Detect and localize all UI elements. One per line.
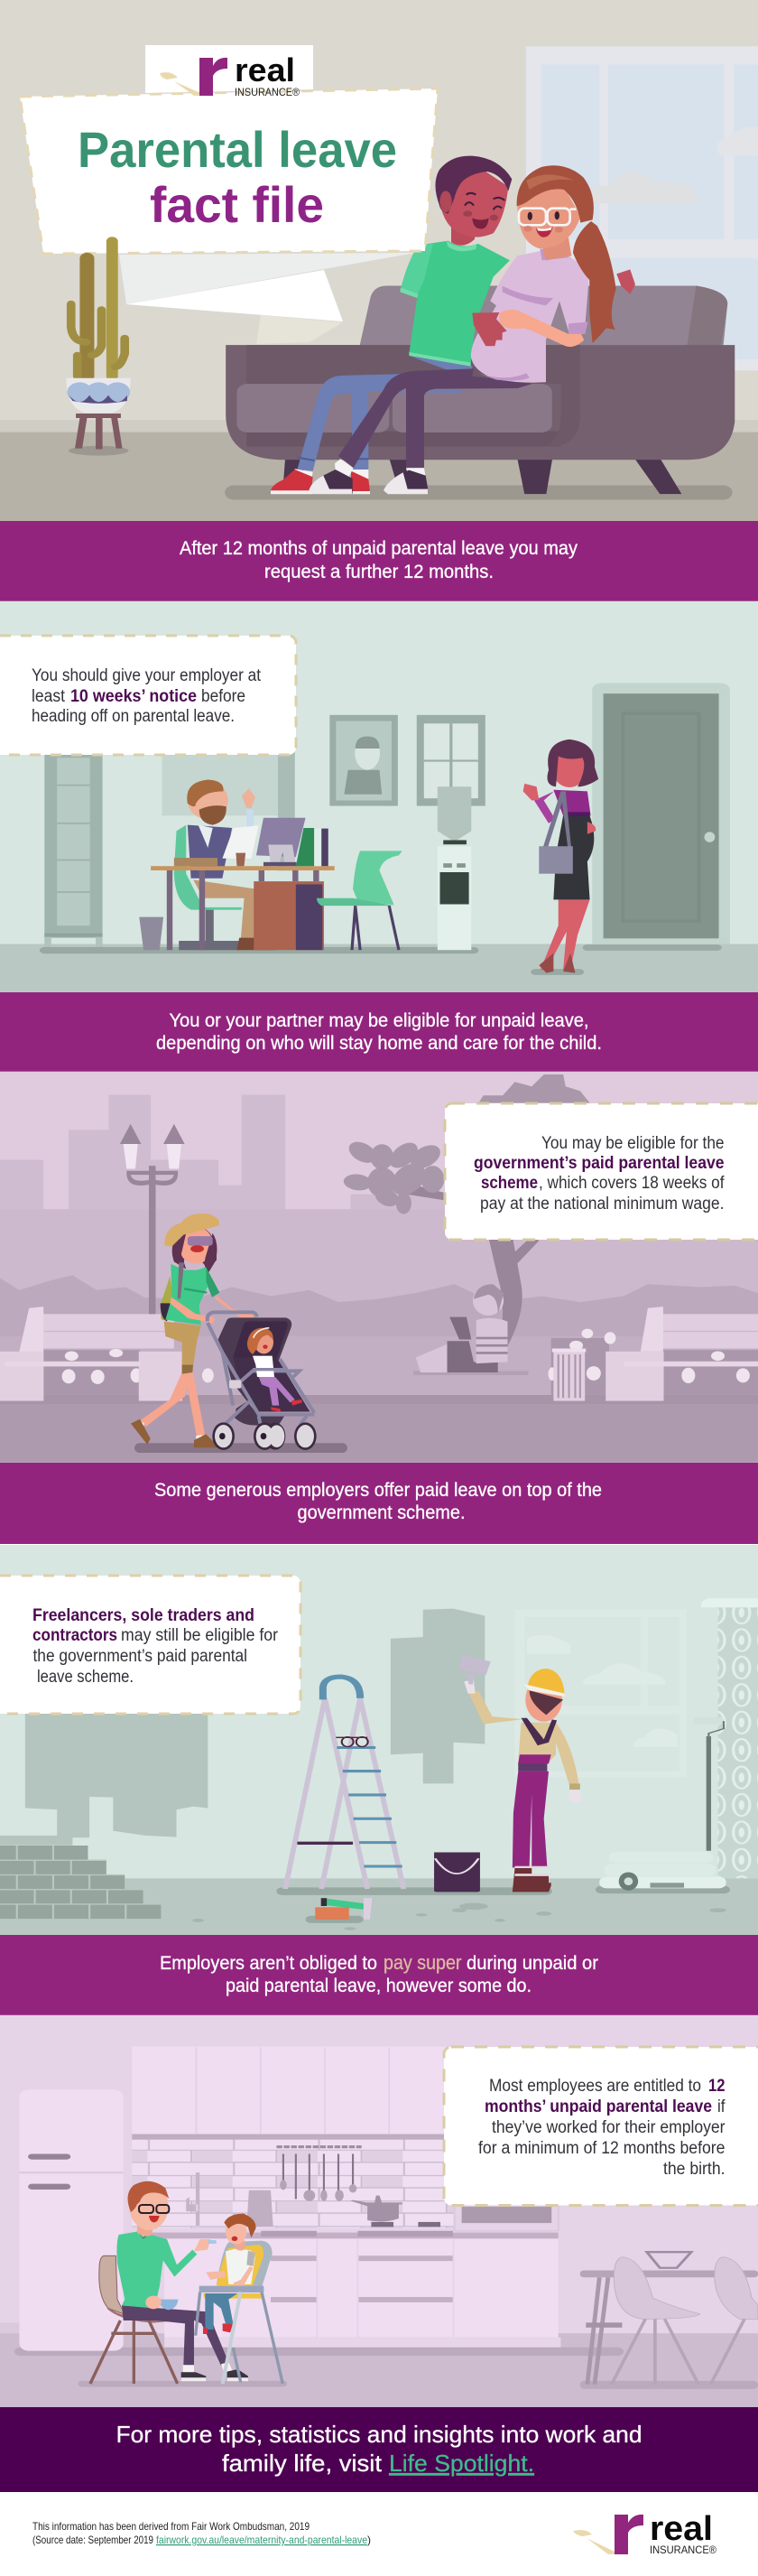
band 5: Life Spotlight.	[389, 2450, 534, 2477]
green chair	[317, 851, 402, 950]
dad	[116, 2181, 248, 2381]
logo: real insurance top: real	[235, 51, 295, 88]
bench right	[605, 1307, 758, 1401]
bucket	[434, 1852, 480, 1892]
band 3: Some generous employers offer paid leave on top of the	[154, 1480, 602, 1501]
litter bin	[552, 1349, 586, 1401]
callout: government scheme: government’s paid parental leave	[474, 1154, 724, 1173]
man at desk	[174, 780, 280, 950]
painter	[459, 1655, 581, 1892]
callout: 10 weeks notice: before	[201, 687, 245, 706]
band 2: depending on who will stay home and care for the child.	[156, 1033, 602, 1054]
door	[583, 683, 730, 951]
logo: real insurance top: INSURANCE®	[235, 86, 300, 98]
band 4: paid parental leave, however some do.	[226, 1976, 532, 1996]
scene: living room and sofa	[0, 0, 758, 521]
woman's head and hat	[164, 1214, 219, 1274]
city skyline	[0, 1095, 448, 1341]
callout: freelancers: leave scheme.	[37, 1668, 134, 1687]
callout: 10 weeks notice: 10 weeks’ notice	[70, 687, 197, 706]
band 4: Employers aren’t obliged to	[160, 1953, 377, 1974]
scene: painter	[0, 1545, 758, 1935]
callout: 12 months unpaid: the birth.	[663, 2160, 726, 2179]
wallpaper rolls and tools	[596, 1852, 730, 1893]
woman and stroller	[131, 1262, 347, 1453]
callout: 12 months unpaid	[444, 2047, 758, 2205]
cactus plant	[66, 241, 131, 456]
dad feeding child	[90, 2181, 282, 2384]
appliances on bench	[186, 2172, 559, 2231]
callout: 10 weeks notice: You should give your employer at	[32, 666, 262, 685]
sofa	[225, 286, 735, 499]
bookshelf	[44, 749, 103, 950]
woman	[131, 1262, 253, 1447]
band 3	[0, 1463, 758, 1544]
title	[78, 121, 397, 233]
flower beds	[43, 1329, 758, 1395]
street lamp	[120, 1124, 185, 1314]
band 1: After 12 months of unpaid parental leave you may	[180, 538, 578, 559]
paint roller	[694, 1717, 724, 1851]
upper cabinets	[132, 2047, 446, 2140]
callout: freelancers: contractors	[32, 1626, 117, 1645]
boy reading	[413, 1284, 529, 1375]
callout: 12 months unpaid: if	[717, 2097, 726, 2116]
source note	[32, 2520, 371, 2546]
source note: This information has been derived from Fair Work Ombudsman, 2019	[32, 2520, 310, 2533]
band 1	[0, 521, 758, 601]
callout: freelancers: may still be eligible for	[121, 1626, 279, 1645]
logo: real insurance footer: real	[650, 2510, 713, 2548]
band 5: For more tips, statistics and insights into work and	[116, 2421, 642, 2448]
callout: 10 weeks notice	[0, 636, 296, 755]
scene: kitchen	[0, 2015, 758, 2408]
callout: 12 months unpaid: Most employees are entitled to	[489, 2077, 701, 2096]
band 2: You or your partner may be eligible for unpaid leave,	[170, 1010, 588, 1031]
band 4	[0, 1935, 758, 2015]
stroller	[208, 1312, 317, 1450]
water cooler	[438, 786, 471, 950]
callout: 12 months unpaid: for a minimum of 12 months before	[478, 2139, 726, 2158]
back window	[162, 749, 295, 870]
callout: 12 months unpaid: they’ve worked for their employer	[492, 2118, 726, 2137]
high chair and child	[196, 2214, 282, 2384]
callout: government scheme: You may be eligible for the	[541, 1134, 724, 1153]
callout: 12 months unpaid: months’ unpaid parental leave	[485, 2097, 712, 2116]
hedge	[0, 1275, 758, 1338]
band 4: pay super	[384, 1951, 462, 1974]
callout: 10 weeks notice: heading off on parental leave.	[32, 707, 235, 726]
man	[271, 156, 635, 494]
scene: office	[0, 601, 758, 993]
title: Parental leave	[78, 121, 397, 178]
band 4: during unpaid or	[467, 1953, 598, 1974]
child in stroller	[247, 1328, 302, 1412]
waste bin	[139, 917, 163, 950]
logo: real insurance footer	[573, 2510, 716, 2556]
callout: freelancers	[0, 1576, 300, 1714]
band 5: family life, visit	[222, 2450, 383, 2477]
ladder	[285, 1677, 403, 1889]
logo: real insurance top	[145, 45, 313, 98]
tile splashback	[132, 2140, 455, 2228]
glasses	[336, 1737, 368, 1746]
title: fact file	[150, 176, 324, 233]
couple on sofa	[271, 156, 635, 494]
lower cabinets	[145, 2233, 560, 2351]
dad's chair	[90, 2255, 178, 2384]
fridge	[14, 2089, 624, 2356]
monitor and binders	[256, 818, 328, 866]
band 3: government scheme.	[298, 1502, 466, 1523]
title callout	[20, 88, 438, 344]
band 2	[0, 992, 758, 1072]
brick and saw	[306, 1898, 372, 1923]
band 5	[0, 2407, 758, 2492]
logo: real insurance footer: INSURANCE®	[650, 2543, 716, 2556]
wallpaper	[701, 1598, 758, 1878]
wall frames	[329, 715, 485, 806]
band 1: request a further 12 months.	[264, 562, 494, 582]
source note: )	[367, 2534, 371, 2546]
callout: freelancers: the government’s paid parental	[32, 1647, 247, 1666]
scene: park	[0, 1072, 758, 1463]
callout: 12 months unpaid: 12	[708, 2077, 726, 2096]
faint window	[515, 1610, 687, 1778]
window	[526, 46, 758, 370]
bricks	[0, 1836, 161, 1919]
tree	[339, 1074, 590, 1354]
callout: 10 weeks notice: least	[32, 687, 66, 706]
callout: freelancers: Freelancers, sole traders and	[32, 1606, 254, 1625]
source note: (Source date: September 2019	[32, 2534, 153, 2546]
dining table and chairs	[580, 2252, 758, 2385]
callout: government scheme	[445, 1103, 758, 1240]
bench left	[0, 1307, 182, 1401]
callout: government scheme: scheme	[481, 1174, 538, 1193]
painted patches	[25, 1609, 485, 1837]
callout: government scheme: , which covers 18 weeks of	[539, 1174, 725, 1193]
woman	[309, 165, 616, 494]
source note: fairwork.gov.au/leave/maternity-and-parental-leave	[156, 2534, 367, 2546]
woman at door	[523, 739, 598, 975]
callout: government scheme: pay at the national minimum wage.	[480, 1195, 724, 1214]
desk	[151, 853, 335, 950]
